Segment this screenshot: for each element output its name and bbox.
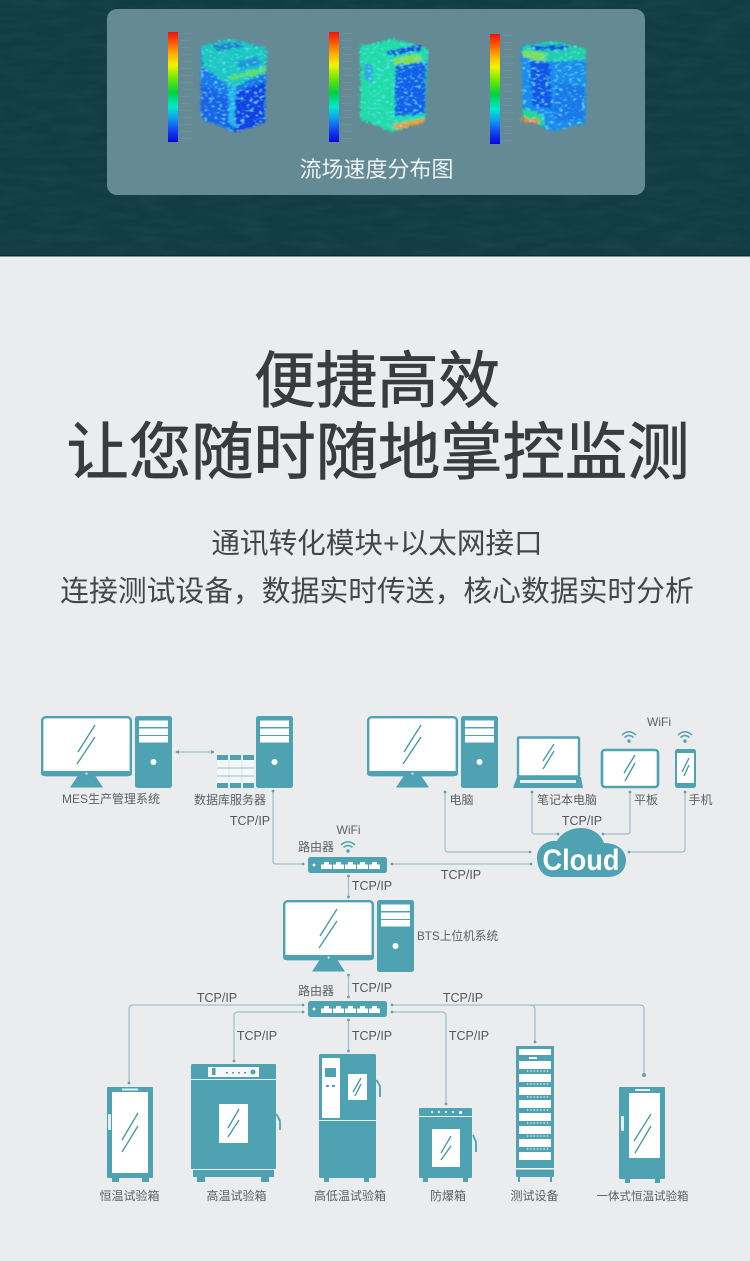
rack: test equipment: 测试设备 [510,1188,559,1203]
cloud: Cloud [542,844,620,877]
chamber: high temperature: 高温试验箱 [206,1188,267,1203]
TCP/IP labels: TCP/IP [352,981,392,995]
database server: 数据库服务器 [194,792,266,807]
title: 便捷高效 [254,347,500,416]
TCP/IP labels: TCP/IP [441,868,481,882]
phone: WiFi [647,715,671,729]
chamber: high temperature [191,1064,280,1203]
connection lines [128,750,686,1105]
chamber: constant temperature [99,1087,160,1203]
chamber: high and low temperature: 高低温试验箱 [314,1188,386,1203]
BTS host system: BTS上位机系统 [417,929,498,943]
TCP/IP labels: TCP/IP [237,1029,277,1043]
TCP/IP labels: TCP/IP [197,991,237,1005]
database server [194,716,293,807]
tablet [602,732,658,807]
panel: flow field velocity distribution [107,9,645,195]
chamber: constant temperature: 恒温试验箱 [99,1188,160,1203]
TCP/IP labels: TCP/IP [230,814,270,828]
heat map 2 [329,32,428,142]
heat map 1 [168,32,267,142]
TCP/IP labels: TCP/IP [352,1029,392,1043]
TCP/IP labels [197,814,602,1043]
subtitle: 连接测试设备，数据实时传送，核心数据实时分析 [60,576,694,608]
chamber: integrated constant temperature: 一体式恒温试验箱 [596,1189,688,1203]
laptop: 笔记本电脑 [537,792,597,807]
router bottom [298,983,387,1017]
computer [367,716,498,807]
dark teal header background [0,0,750,256]
tablet: 平板 [634,793,658,807]
subtitle: 通讯转化模块+以太网接口 [211,528,543,560]
chamber: explosion-proof [419,1108,476,1203]
router bottom: 路由器 [298,983,334,998]
chamber: high and low temperature [314,1054,386,1203]
computer: 电脑 [449,793,474,807]
router top: WiFi [336,823,360,837]
title: 让您随时随地掌控监测 [67,419,689,488]
laptop [513,738,597,807]
heat map 3 [490,34,586,144]
router top: 路由器 [298,839,334,854]
panel caption: 流场速度分布图 [299,157,454,182]
TCP/IP labels: TCP/IP [443,991,483,1005]
title [67,347,689,488]
chamber: explosion-proof: 防爆箱 [430,1188,466,1203]
TCP/IP labels: TCP/IP [562,814,602,828]
phone [647,715,713,807]
phone: 手机 [688,793,713,807]
cloud [537,828,626,877]
TCP/IP labels: TCP/IP [352,879,392,893]
subtitle [60,528,694,608]
rack: test equipment [510,1046,559,1203]
TCP/IP labels: TCP/IP [449,1029,489,1043]
router top [298,823,387,873]
BTS host system [283,900,498,972]
chamber: integrated constant temperature [596,1087,688,1203]
MES workstation: MES生产管理系统 [62,791,160,806]
MES workstation [41,716,172,806]
